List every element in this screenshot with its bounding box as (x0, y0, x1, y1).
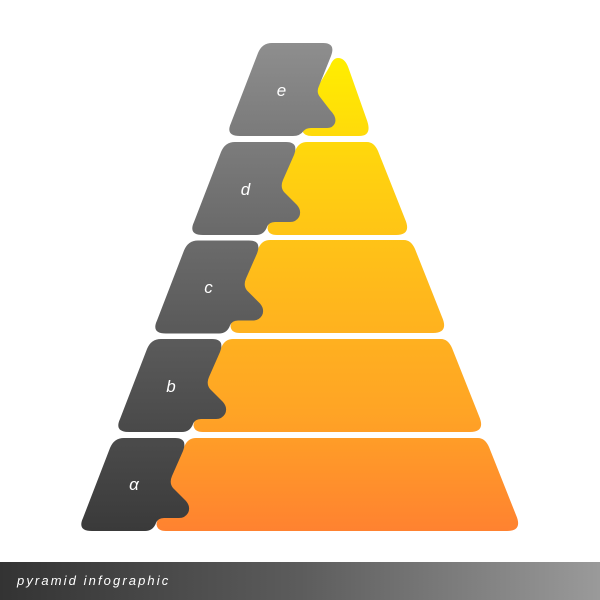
tab b: b (166, 377, 176, 396)
tab e: e (277, 81, 286, 100)
tab b (118, 339, 226, 432)
tab e (229, 43, 335, 136)
tab d (192, 142, 300, 235)
pyramid level a: deep orange base (156, 438, 518, 531)
pyramid level c: amber band (230, 240, 444, 333)
footer strip (0, 562, 600, 600)
tab c: c (204, 278, 213, 297)
tab d: d (241, 180, 251, 199)
footer title: pyramid infographic (16, 573, 170, 588)
pyramid level b: orange band (194, 339, 481, 432)
tab a: α (129, 475, 140, 494)
tab c (155, 240, 263, 334)
pyramid level e: yellow apex (302, 58, 369, 136)
tab a (81, 438, 189, 531)
pyramid level d: gold band (268, 142, 407, 235)
